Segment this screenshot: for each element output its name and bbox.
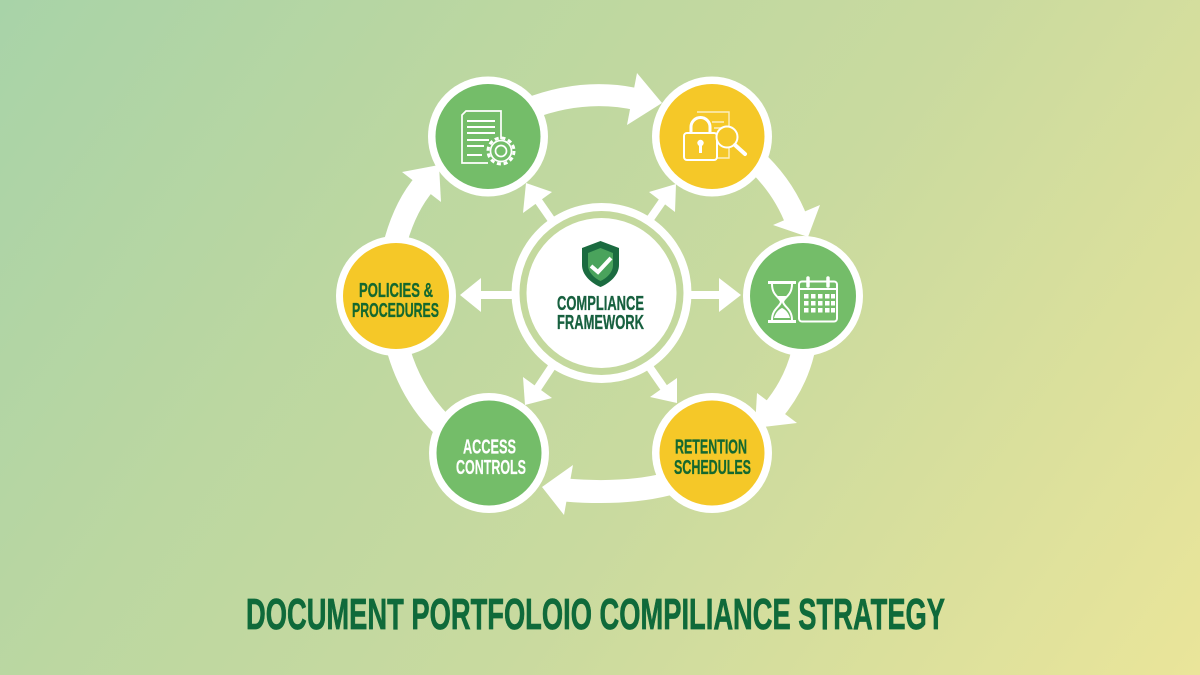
label: compliance framework: FRAMEWORK: [557, 312, 644, 334]
spoke arrow: right: [685, 278, 741, 312]
arrow: timing to retention schedules: [755, 352, 803, 428]
label: policies and procedures: POLICIES &: [359, 280, 433, 302]
icon: shield with check: [582, 241, 619, 287]
icon: padlock and magnifier over a document: [684, 112, 745, 160]
node: retention schedules: [652, 393, 772, 513]
spoke arrow: bottom right: [648, 365, 677, 403]
node: policies and procedures: [336, 236, 456, 356]
label: compliance framework: COMPLIANCE: [557, 293, 644, 315]
arrow: security to timing: [760, 165, 820, 237]
node: security and search: [652, 76, 772, 196]
cycle diagram: [336, 73, 863, 515]
node: document settings: [428, 76, 548, 196]
arrow: policies to documents: [396, 165, 441, 240]
node: timing: [743, 236, 863, 356]
label: retention schedules: SCHEDULES: [674, 457, 751, 479]
arc: access controls to policies: [399, 352, 442, 425]
label: retention schedules: RETENTION: [675, 436, 747, 458]
icon: hourglass and calendar: [768, 278, 837, 322]
label: access controls: [456, 436, 526, 479]
icon: document with gear: [462, 111, 514, 164]
hub: compliance framework: [512, 203, 692, 383]
label: policies and procedures: [352, 280, 439, 322]
node: access controls: [429, 393, 549, 513]
spoke arrow: bottom left: [523, 365, 553, 405]
label: retention schedules: [674, 436, 751, 479]
spoke arrow: top left: [523, 183, 553, 222]
label: compliance framework: [557, 293, 644, 334]
label: access controls: ACCESS: [463, 436, 516, 458]
spoke arrow: top right: [648, 184, 676, 222]
label: access controls: CONTROLS: [456, 457, 526, 479]
arrow: retention schedules to access controls: [542, 465, 668, 515]
spoke arrow: left: [460, 278, 518, 312]
arrow: documents to security: [528, 73, 662, 125]
label: policies and procedures: PROCEDURES: [352, 300, 439, 322]
